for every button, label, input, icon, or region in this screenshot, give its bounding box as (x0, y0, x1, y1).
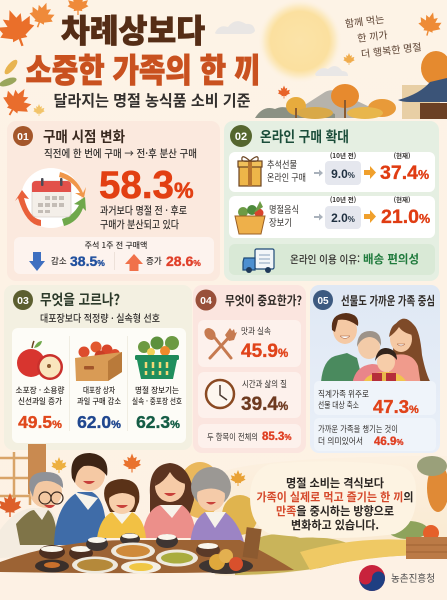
subtitle: 달라지는 명절 농식품 소비 기준 (54, 89, 250, 111)
badge 04: 04 (200, 295, 212, 307)
icon: gift box (238, 157, 262, 186)
autumn hills (0, 454, 447, 575)
icon: green vegetable basket (135, 336, 179, 379)
value 2.0%: 2.0% (331, 211, 355, 225)
title (26, 6, 260, 92)
row: reason for online use: 온라인 이용 이유: (290, 252, 360, 267)
crate with persimmons (406, 525, 447, 559)
card: taste and value: 맛과 실속 (241, 325, 271, 337)
stat 39.4%: 39.4% (241, 394, 288, 415)
badge 05: 05 (317, 296, 329, 307)
card: week-before spending (14, 237, 214, 274)
row: holiday food shopping: (현재) (394, 194, 410, 204)
card: taste and value (198, 320, 301, 367)
panel 02: online purchases (224, 121, 439, 281)
icon: clock (206, 380, 234, 408)
row: reason for online use (229, 244, 435, 275)
badge 01 (13, 126, 33, 146)
column: large box: 과일 구매 감소 (77, 396, 121, 407)
panel 01: purchase timing (7, 121, 220, 281)
card: time and quality of life: 시간과 삶의 질 (242, 378, 287, 390)
card: total of both items: 두 항목이 전체의 (207, 431, 258, 443)
icon: spoon and fork (202, 326, 237, 358)
bottom scene: family meal (0, 444, 447, 576)
value 37.4%: 37.4% (380, 162, 429, 184)
stat 58.3%: 58.3% (99, 164, 194, 207)
callout: conclusion: 명절 소비는 격식보다 (286, 475, 384, 491)
icon: delivery truck (243, 249, 274, 273)
subheading 03: 대포장보다 적정량 · 실속형 선호 (40, 310, 160, 325)
grandfather (0, 472, 64, 558)
badge 02 (230, 125, 252, 147)
handwritten note: 더 행복한 명절 (360, 38, 422, 61)
value 21.0%: 21.0% (381, 206, 430, 228)
callout: conclusion: 가족이 실제로 먹고 즐기는 한 끼의 (256, 489, 414, 505)
row: holiday food shopping: 장보기 (269, 215, 292, 229)
card: week-before spending: 증가 (146, 255, 162, 267)
row: Chuseok gifts online: (10년 전) (330, 150, 356, 160)
card: immediate family gifts: 직계가족 위주로 (318, 388, 369, 400)
stat 62.3%: 62.3% (136, 412, 180, 432)
grandmother (190, 467, 246, 552)
value 9.0% (325, 161, 361, 185)
column: holiday shopping (132, 336, 182, 432)
girl (97, 479, 146, 538)
stat description: 과거보다 명절 전 · 후로 (100, 203, 187, 218)
column: small packs (16, 341, 65, 432)
row: holiday food shopping: 명절음식 (269, 202, 299, 216)
row: Chuseok gifts online: 온라인 구매 (267, 170, 306, 184)
column: holiday shopping: 실속 · 중포장 선호 (132, 396, 182, 407)
icon: grocery basket (235, 201, 265, 234)
panel 05: gifts for close family (310, 285, 440, 453)
father (54, 453, 107, 545)
subheading 01: 직전에 한 번에 구매 → 전·후 분산 구매 (44, 146, 197, 161)
panel 04: what matters (193, 285, 306, 453)
card: meaning of caring: 가까운 가족을 챙기는 것이 (318, 423, 398, 435)
heading 02: 온라인 구매 확대 (260, 126, 349, 147)
column: large box: 대포장 상자 (83, 385, 116, 396)
card: total of both items: 85.3% (262, 431, 292, 443)
handwritten note: 함께 먹는 (344, 11, 385, 30)
illustration: family with gift (321, 313, 431, 389)
badge 05 (313, 290, 333, 310)
stat 46.9%: 46.9% (374, 436, 404, 448)
decorative maple leaves: header (0, 0, 444, 122)
badge 04 (196, 290, 216, 310)
header illustration: moon and autumn scenery (215, 0, 447, 119)
stat increase: 28.6% (166, 253, 201, 269)
logo: Rural Development Administration: 농촌진흥청 (391, 570, 435, 585)
column: small packs: 신선과일 증가 (18, 396, 63, 407)
card: meaning of caring (314, 418, 436, 451)
panel 03: what do they choose (4, 285, 192, 450)
card: week-before spending: 감소 (51, 255, 67, 267)
stat description: 구매가 분산되고 있다 (100, 217, 179, 232)
badge 02: 02 (235, 131, 247, 143)
icon: up arrow (125, 254, 143, 271)
column: large box (75, 342, 122, 432)
callout: conclusion: 변화하고 있습니다. (291, 517, 379, 533)
heading 03: 무엇을 고르나? (40, 289, 120, 310)
row: Chuseok gifts online (229, 150, 435, 192)
row: Chuseok gifts online: (현재) (394, 150, 410, 160)
card: week-before spending: 주석 1주 전 구매액 (85, 240, 147, 251)
stat 45.9%: 45.9% (241, 341, 288, 362)
value 2.0% (325, 206, 361, 229)
heading 01: 구매 시점 변화 (43, 126, 125, 147)
card: time and quality of life (198, 372, 301, 418)
heading 04: 무엇이 중요한가? (225, 290, 302, 309)
icon: fruit crate (75, 342, 122, 381)
mother (142, 463, 195, 538)
value 9.0%: 9.0% (331, 167, 355, 181)
icon: down arrow (29, 252, 45, 271)
stat description (100, 203, 187, 232)
row: Chuseok gifts online: 추석선물 (267, 157, 297, 171)
stat 47.3%: 47.3% (373, 396, 419, 417)
card: immediate family gifts (314, 381, 436, 417)
row: holiday food shopping: (10년 전) (330, 194, 356, 204)
handwritten note: 한 끼가 (356, 26, 388, 45)
icon: apples (17, 341, 63, 380)
card: total of both items (198, 424, 301, 448)
callout: conclusion: 만족을 중시하는 방향으로 (276, 503, 394, 519)
card: immediate family gifts: 선물 대상 축소 (318, 399, 359, 411)
column: small packs: 소포장 · 소용량 (16, 385, 65, 396)
title: 차례상보다 (61, 6, 205, 52)
table with dishes (0, 527, 294, 574)
column: holiday shopping: 명절 장보기는 (135, 385, 179, 396)
card: meaning of caring: 더 의미있어서 (318, 435, 363, 447)
title: 소중한 가족의 한 끼 (26, 44, 260, 92)
row: holiday food shopping (229, 194, 435, 238)
stat decrease: 38.5% (70, 253, 105, 269)
badge 03 (13, 290, 33, 310)
handwritten note (344, 7, 422, 62)
badge 03: 03 (17, 295, 29, 307)
stat 62.0%: 62.0% (77, 412, 121, 432)
logo: Rural Development Administration (359, 565, 435, 591)
badge 01: 01 (17, 131, 29, 143)
row: reason for online use: 배송 편의성 (363, 251, 419, 267)
stat 49.5%: 49.5% (18, 412, 62, 432)
window lattice (0, 444, 46, 505)
icon: calendar with cycle arrows (15, 168, 86, 228)
callout: conclusion (250, 461, 416, 538)
